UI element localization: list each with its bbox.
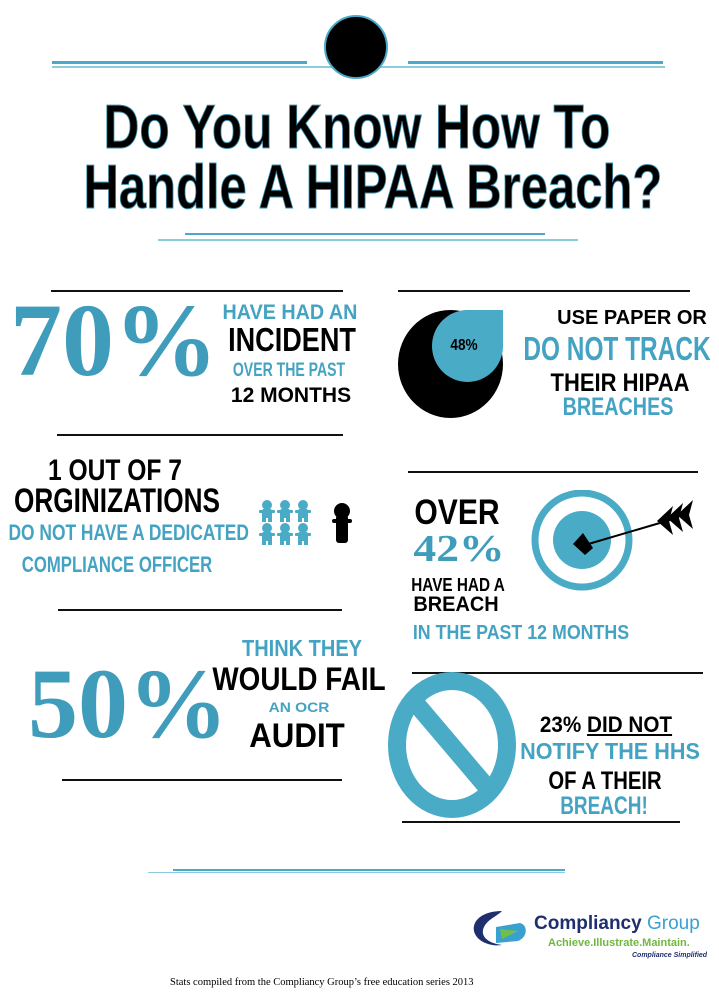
panel: 48% paper: 48% — [450, 337, 478, 354]
panel: 1 out of 7: DO NOT HAVE A DEDICATED — [8, 520, 249, 545]
panel: 42% breach: HAVE HAD A — [411, 575, 505, 595]
panel: 50% audit: AN OCR — [269, 699, 329, 715]
panel: 48% paper: DO NOT TRACK — [523, 330, 711, 367]
footer text: Stats compiled from the Compliancy Group’s free education series 2013 — [170, 977, 474, 988]
panel: 23% did not notify: NOTIFY THE HHS — [520, 738, 700, 764]
text block — [223, 301, 357, 407]
panel: 50% audit: THINK THEY — [242, 635, 362, 661]
panel: 23% did not notify — [388, 672, 700, 820]
panel: 48% paper: BREACHES — [563, 393, 673, 421]
panel: 50% audit: WOULD FAIL — [212, 661, 386, 697]
panel: 23% did not notify: 23% DID NOT — [540, 712, 672, 737]
panel: 1 out of 7: COMPLIANCE OFFICER — [22, 552, 212, 577]
panel: 1 out of 7: 1 OUT OF 7 — [48, 454, 182, 487]
panel: 50% audit — [28, 635, 386, 759]
panel: 42% breach: IN THE PAST 12 MONTHS — [413, 622, 629, 644]
icon: target with arrow — [532, 490, 693, 590]
text block: 12 MONTHS — [231, 384, 351, 407]
panel: 1 out of 7: ORGINIZATIONS — [14, 482, 220, 520]
text block: INCIDENT — [228, 321, 356, 358]
panel: 48% paper: THEIR HIPAA — [551, 369, 689, 397]
panel: 42% breach — [411, 490, 693, 644]
icon: no sign — [388, 672, 516, 818]
panel: 50% audit: AUDIT — [249, 717, 345, 755]
icon: black circle — [324, 15, 388, 79]
logo: Compliancy Group — [534, 913, 700, 934]
text block: HAVE HAD AN — [223, 301, 357, 324]
title — [84, 93, 662, 222]
panel: 1 out of 7 — [8, 454, 352, 577]
title: Do You Know How To — [104, 93, 610, 162]
panel: 23% did not notify: BREACH! — [560, 792, 648, 820]
text block: USE PAPER OR — [557, 307, 707, 329]
panel: 50% audit: 50% — [28, 648, 228, 759]
logo — [474, 911, 708, 959]
panel: 70% incident — [10, 283, 357, 407]
panel: 48% paper — [398, 307, 711, 421]
panel: 23% did not notify: OF A THEIR — [548, 767, 662, 795]
title: Handle A HIPAA Breach? — [84, 153, 662, 222]
panel: 42% breach: OVER — [414, 493, 500, 532]
logo: Achieve.Illustrate.Maintain. — [548, 937, 690, 949]
text block: OVER THE PAST — [233, 360, 345, 381]
stat 70%: 70% — [10, 283, 218, 398]
pie chart — [398, 310, 503, 418]
panel: 42% breach: BREACH — [413, 593, 499, 616]
panel: 42% breach: 42% — [413, 528, 505, 570]
icon: people — [259, 500, 352, 545]
logo: Compliance Simplified — [632, 952, 707, 959]
header ornament — [52, 15, 665, 79]
